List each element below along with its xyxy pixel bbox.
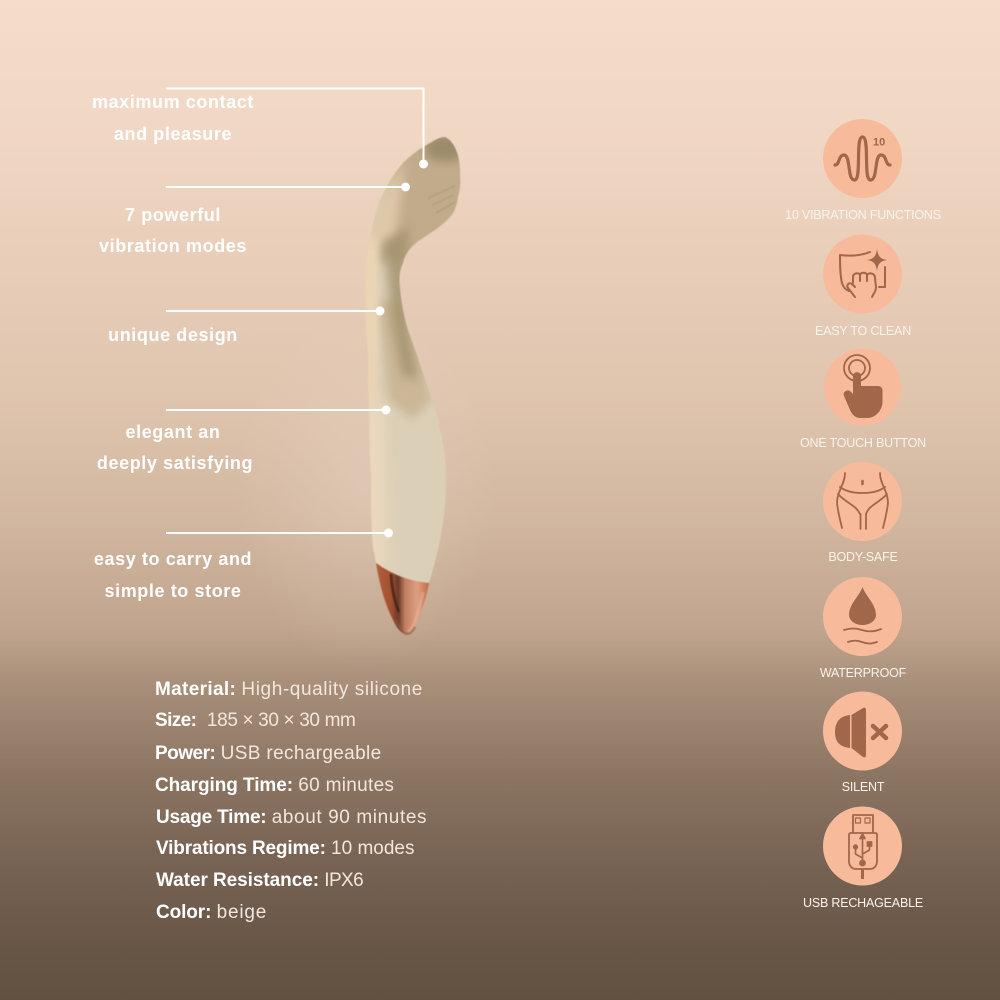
callout dots <box>376 160 428 538</box>
spec: color: Color: beige <box>156 902 267 923</box>
icon: waterproof drop <box>823 577 902 656</box>
caption: usb rechageable: USB RECHAGEABLE <box>803 896 923 910</box>
spec: charging time: Charging Time: 60 minutes <box>155 775 394 796</box>
caption: body-safe: BODY-SAFE <box>828 550 898 564</box>
caption: one touch button: ONE TOUCH BUTTON <box>800 436 926 450</box>
spec: size: Size: 185 × 30 × 30 mm <box>155 710 356 731</box>
callout text: maximum contact: maximum contact <box>92 92 254 112</box>
spec list <box>155 679 427 923</box>
caption: easy to clean: EASY TO CLEAN <box>815 324 911 338</box>
callout text: simple to store: simple to store <box>104 581 242 601</box>
callout text: and pleasure: and pleasure <box>114 124 232 144</box>
callout text: deeply satisfying: deeply satisfying <box>97 453 253 473</box>
caption: silent: SILENT <box>842 780 884 794</box>
callout lines <box>166 88 424 533</box>
spec: vibrations regime: Vibrations Regime: 10 modes <box>156 838 414 859</box>
icon: easy to clean hand <box>823 234 902 314</box>
copper tip <box>376 563 429 634</box>
caption: 10 vibration functions: 10 VIBRATION FUNCTIONS <box>785 208 941 222</box>
icons column <box>823 119 902 886</box>
spec: power: Power: USB rechargeable <box>155 743 382 764</box>
icon: silent speaker <box>823 692 902 770</box>
spec: water resistance: Water Resistance: IPX6 <box>156 870 363 891</box>
product body <box>366 136 461 583</box>
spec: material: Material: High-quality silicone <box>155 679 423 700</box>
caption: waterproof: WATERPROOF <box>820 666 906 680</box>
callout text: unique design: unique design <box>108 325 238 345</box>
icon: one touch button <box>824 348 901 426</box>
product illustration with callout lines <box>166 88 461 636</box>
callout text: easy to carry and: easy to carry and <box>94 549 252 569</box>
callout text: 7 powerful: 7 powerful <box>125 205 221 225</box>
icon: usb <box>823 806 902 886</box>
icon: vibration waves <box>823 119 902 198</box>
callout text: elegant an: elegant an <box>125 422 221 442</box>
spec: usage time: Usage Time: about 90 minutes <box>156 807 427 828</box>
icon: vibration waves: 10 <box>873 136 885 148</box>
icon: body-safe <box>823 462 902 541</box>
callout text: vibration modes: vibration modes <box>99 236 247 256</box>
